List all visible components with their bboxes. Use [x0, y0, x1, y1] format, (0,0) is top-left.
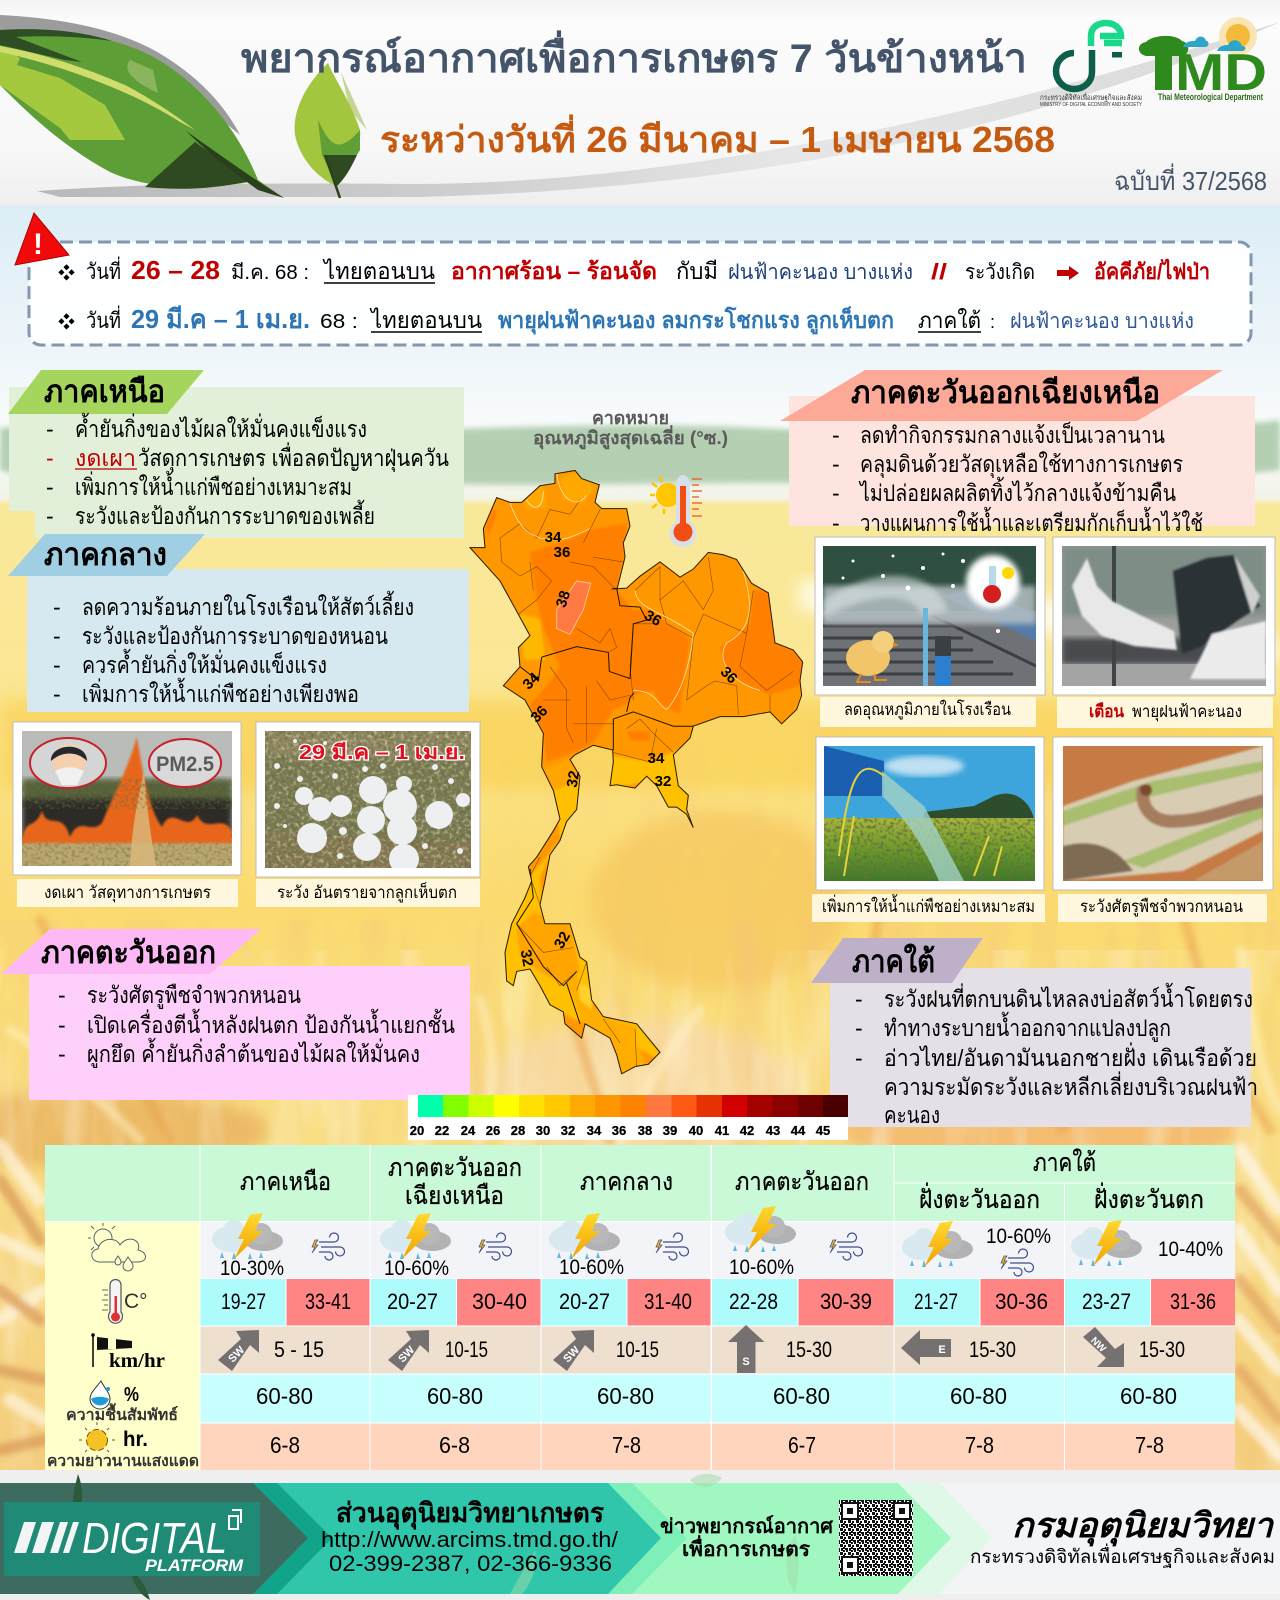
caption: no burning [17, 879, 238, 907]
alert line 1: มี.ค. 68 : [231, 262, 309, 284]
map temperature labels: 36 [554, 544, 570, 561]
forecast table [45, 1145, 1235, 1470]
heading: north [8, 370, 204, 414]
heading: south [811, 938, 983, 983]
alert line 2: ภาคใต้ [918, 308, 981, 333]
panel: east [1, 929, 470, 1100]
row: relative humidity: ความชื้นสัมพัทธ์ [66, 1403, 178, 1424]
map heading: คาดหมาย [592, 408, 669, 428]
list: east advice: - [58, 982, 66, 1008]
map heading: อุณหภูมิสูงสุดเฉลี่ย (°ซ.) [533, 425, 728, 450]
map temperature labels: 36 [641, 607, 664, 630]
list: east advice: เปิดเครื่องตีน้ำหลังฝนตก ป้องกันน้ำแยกชั้น [87, 1009, 455, 1038]
icon: wind arrows: SW [226, 1344, 248, 1365]
swoosh shadow [37, 22, 1280, 197]
alert line 2: : [990, 312, 995, 332]
caption: storm warning: เตือน [1089, 701, 1124, 721]
row: temperature [102, 1280, 1216, 1323]
list: northeast advice [832, 420, 1203, 536]
map temperature labels: 32 [655, 773, 671, 790]
list: north advice: - [46, 416, 54, 442]
list: north advice [46, 413, 449, 529]
icon: large green leaf [0, 15, 284, 198]
legend: temperature colour scale: 22 [435, 1123, 449, 1138]
list: south advice: - [855, 1015, 863, 1041]
legend: temperature colour scale: 42 [740, 1123, 754, 1138]
alert line 2 [58, 304, 1194, 335]
title: พยากรณ์อากาศเพื่อการเกษตร 7 วันข้างหน้า [241, 30, 1027, 81]
subtitle: date range: ระหว่างวันที่ 26 มีนาคม – 1 เมษายน 2568 [380, 114, 1055, 160]
humidity values: 60-80 [1120, 1383, 1177, 1409]
humidity values: 60-80 [256, 1383, 313, 1409]
icon: thermometer label [102, 1280, 148, 1323]
list: central advice: เพิ่มการให้น้ำแก่พืชอย่างเพียงพอ [82, 678, 359, 707]
temperature values: 20-27 [387, 1289, 438, 1314]
list: north advice: - [46, 474, 54, 500]
list: south advice: - [855, 986, 863, 1012]
sunshine values [270, 1432, 1164, 1458]
news label: ข่าวพยากรณ์อากาศ [660, 1515, 834, 1538]
caption: beware hail: ระวัง อันตรายจากลูกเห็บตก [277, 881, 457, 903]
list: north advice: วัสดุการเกษตร เพื่อลดปัญหาฝุ่นควัน [138, 442, 449, 472]
icon: thermometer label: C° [124, 1290, 148, 1313]
list: north advice: - [46, 445, 54, 471]
caption: beware worm pests: ระวังศัตรูพืชจำพวกหนอน [1080, 897, 1243, 917]
heading: central: ภาคกลาง [44, 537, 167, 572]
row: relative humidity [66, 1381, 1177, 1424]
list: northeast advice: ไม่ปล่อยผลผลิตทิ้งไว้กลางแจ้งข้ามคืน [858, 477, 1176, 506]
map temperature labels: 38 [553, 589, 574, 610]
caption: beware worm pests [1058, 894, 1267, 922]
list: north advice: เพิ่มการให้น้ำแก่พืชอย่างเหมาะสม [75, 471, 352, 500]
rain chances: 10-30% [220, 1257, 284, 1280]
caption: storm warning: พายุฝนฟ้าคะนอง [1132, 702, 1242, 722]
alert line 1: 26 – 28 [131, 255, 220, 285]
alert line 2: ฝนฟ้าคะนอง บางแห่ง [1010, 310, 1194, 333]
list: east advice [58, 982, 455, 1068]
humidity values: 60-80 [773, 1383, 830, 1409]
wind speeds: 10-15 [445, 1337, 488, 1362]
photo: roof sprinkler and chick [815, 537, 1045, 695]
department name [970, 1507, 1275, 1568]
legend: temperature colour scale: 30 [536, 1123, 550, 1138]
panel: north [8, 370, 464, 538]
list: south advice: ทำทางระบายน้ำออกจากแปลงปลูก [884, 1012, 1171, 1042]
department name: กระทรวงดิจิทัลเพื่อเศรษฐกิจและสังคม [970, 1543, 1275, 1568]
list: central advice: - [53, 652, 61, 678]
sunshine values: 6-8 [270, 1432, 300, 1458]
caption: storm warning [1057, 697, 1273, 728]
sunshine values: 7-8 [965, 1432, 994, 1458]
photo: storm-damaged tents [1053, 537, 1275, 695]
rain chances: 10-60% [559, 1256, 624, 1279]
map temperature labels: 34 [545, 529, 562, 546]
wind speeds: 10-15 [616, 1337, 659, 1362]
caption: reduce heat in coop [820, 697, 1036, 727]
alert line 1: อากาศร้อน – ร้อนจัด [451, 258, 657, 284]
caption: no burning: งดเผา วัสดุทางการเกษตร [44, 883, 211, 903]
row: weather [88, 1206, 1223, 1280]
sunshine values: 7-8 [1135, 1432, 1164, 1458]
alert line 1: อัคคีภัย/ไฟป่า [1094, 258, 1210, 284]
alert line 1: กับมี [676, 258, 718, 284]
legend: temperature colour scale: 32 [561, 1123, 575, 1138]
map temperature labels: 36 [527, 702, 551, 726]
temperature values: 21-27 [914, 1289, 958, 1314]
photo: hailstones: 29 มี.ค – 1 เม.ย. [299, 741, 465, 764]
caption: irrigate suitably [812, 894, 1045, 922]
caption: irrigate suitably: เพิ่มการให้น้ำแก่พืชอย่างเหมาะสม [822, 894, 1035, 916]
legend: temperature colour scale [408, 1095, 848, 1140]
table header row: ภาคใต้ [1033, 1148, 1096, 1177]
alert box [15, 213, 1251, 345]
list: south advice [855, 983, 1258, 1128]
weather icons [212, 1206, 1142, 1276]
temperature values: 20-27 [559, 1289, 610, 1314]
temperature values: 31-40 [644, 1289, 692, 1314]
icon: sun: hr. [123, 1428, 148, 1451]
list: northeast advice: - [832, 451, 840, 477]
icon: wind arrows: NW [1088, 1335, 1108, 1355]
panel: northeast [780, 370, 1255, 536]
heading: south: ภาคใต้ [852, 943, 935, 979]
temperature values: 22-28 [729, 1289, 778, 1314]
news label: เพื่อการเกษตร [682, 1534, 810, 1561]
contact text: ส่วนอุตุนิยมวิทยาเกษตร [336, 1498, 604, 1530]
legend: temperature colour scale: 44 [791, 1123, 806, 1138]
list: central advice: - [53, 623, 61, 649]
map temperature labels: 34 [648, 750, 665, 767]
list: central advice: ลดความร้อนภายในโรงเรือนให้สัตว์เลี้ยง [82, 591, 414, 620]
map temperature labels: 32 [564, 769, 583, 789]
list: northeast advice: ลดทำกิจกรรมกลางแจ้งเป็นเวลานาน [860, 420, 1165, 448]
list: central advice: ระวังและป้องกันการระบาดของหนอน [82, 623, 388, 649]
table header row: ฝั่งตะวันตก [1094, 1182, 1204, 1214]
list: central advice: ควรค้ำยันกิ่งให้มั่นคงแข็งแรง [82, 649, 327, 678]
humidity values: 60-80 [597, 1383, 654, 1409]
alert line 2: 29 มี.ค – 1 เม.ย. [131, 304, 310, 334]
list: south advice: - [855, 1045, 863, 1071]
humidity values: 60-80 [427, 1383, 483, 1409]
heading: northeast: ภาคตะวันออกเฉียงเหนือ [851, 375, 1160, 410]
list: east advice: - [58, 1012, 66, 1038]
sunshine values: 6-8 [439, 1432, 470, 1458]
temperature values: 30-40 [472, 1289, 527, 1314]
qr code [839, 1500, 913, 1576]
list: northeast advice: - [832, 510, 840, 536]
table header row [240, 1148, 1204, 1214]
wind speeds: 15-30 [969, 1337, 1016, 1362]
sunshine values: 6-7 [788, 1432, 816, 1458]
alert line 1: ❖ [58, 264, 75, 283]
table header row: เฉียงเหนือ [405, 1182, 504, 1210]
caption: beware hail [256, 879, 480, 907]
row: sunshine duration: ความยาวนานแสงแดด [47, 1453, 199, 1470]
list: north advice: ค้ำยันกิ่งของไม้ผลให้มั่นคงแข็งแรง [75, 413, 367, 442]
heading: north: ภาคเหนือ [44, 374, 165, 409]
department name: กรมอุตุนิยมวิทยา [1012, 1507, 1275, 1547]
legend: temperature colour scale: 28 [511, 1123, 525, 1138]
temperature values: 31-36 [1170, 1289, 1216, 1314]
alert line 1: ระวังเกิด [965, 261, 1035, 284]
panel: central [8, 534, 469, 712]
list: central advice [53, 591, 414, 707]
rain chances: 10-60% [986, 1225, 1051, 1248]
icon: windsock [91, 1333, 165, 1372]
legend: temperature colour scale: 36 [612, 1123, 626, 1138]
heading: northeast [780, 370, 1223, 421]
list: east advice: ระวังศัตรูพืชจำพวกหนอน [87, 982, 301, 1009]
logo: digital platform: PLATFORM [145, 1556, 244, 1575]
temperature values: 19-27 [221, 1289, 266, 1314]
map temperature labels: 34 [519, 669, 544, 693]
photo: water pipe over rice [816, 737, 1044, 890]
icon: wind arrows [218, 1325, 1124, 1373]
icon: warning triangle [15, 213, 69, 265]
alert line 1: ฝนฟ้าคะนอง บางแห่ง [728, 261, 913, 284]
icon: thermometer and sun [650, 475, 702, 547]
legend: temperature colour scale: 41 [715, 1123, 729, 1138]
icon: wind arrows: S [742, 1356, 750, 1368]
map temperature labels [517, 529, 741, 968]
temperature values [221, 1289, 1216, 1314]
logo: ministry of digital economy [1040, 23, 1143, 108]
contact text: http://www.arcims.tmd.go.th/ [321, 1527, 619, 1552]
alert line 2: ❖ [58, 313, 75, 332]
legend: temperature colour scale: 40 [689, 1123, 703, 1138]
icon: small green leaf [295, 63, 367, 198]
map heading [533, 408, 728, 450]
sunshine values: 7-8 [612, 1432, 641, 1458]
icon: warning triangle: ! [33, 228, 43, 261]
humidity values: 60-80 [950, 1383, 1007, 1409]
logo: digital platform: DIGITAL [82, 1514, 227, 1563]
map temperature labels: 32 [517, 948, 536, 968]
heading: east [1, 929, 261, 974]
caption: reduce heat in coop: ลดอุณหภูมิภายในโรงเรือน [844, 699, 1011, 720]
row: sunshine duration [47, 1422, 1164, 1470]
rain chances: 10-60% [384, 1257, 449, 1280]
table header row: ภาคเหนือ [240, 1168, 331, 1196]
footer band [0, 1474, 1280, 1600]
legend: temperature colour scale: 24 [461, 1123, 476, 1138]
list: northeast advice: - [832, 480, 840, 506]
icon: wind arrows: SW [396, 1344, 418, 1365]
contact text: 02-399-2387, 02-366-9336 [329, 1551, 612, 1576]
rain chances: 10-60% [729, 1256, 794, 1279]
alert line 1: // [931, 259, 947, 284]
photo: stem borer worm [1053, 737, 1273, 890]
list: northeast advice: - [832, 422, 840, 448]
icon: sun [79, 1422, 148, 1458]
alert line 1 [58, 255, 1210, 285]
alert line 2: 68 : [320, 311, 358, 333]
legend: temperature colour scale: 39 [663, 1123, 677, 1138]
temperature values: 23-27 [1082, 1289, 1131, 1314]
logo: ministry of digital economy: กระทรวงดิจิทัลเพื่อเศรษฐกิจและสังคม [1040, 92, 1142, 102]
list: south advice: อ่าวไทย/อันดามันนอกชายฝั่ง เดินเรือด้วย [884, 1042, 1257, 1071]
icon: windsock: km/hr [109, 1350, 165, 1372]
legend: temperature colour scale: 43 [766, 1123, 780, 1138]
icon: wind arrows: SW [561, 1344, 583, 1365]
issue number: ฉบับที่ 37/2568 [1114, 163, 1267, 196]
legend: temperature colour scale: 45 [816, 1123, 830, 1138]
contact text [321, 1498, 619, 1576]
logo: thai meteorological department [1139, 17, 1267, 102]
map temperature labels: 36 [717, 663, 741, 687]
table header row: ภาคตะวันออก [735, 1168, 869, 1196]
list: northeast advice: คลุมดินด้วยวัสดุเหลือใช้ทางการเกษตร [860, 451, 1183, 478]
legend: temperature colour scale: 38 [638, 1123, 652, 1138]
wind speeds: 15-30 [1139, 1337, 1185, 1362]
photo: field burning with PM2.5 [13, 722, 241, 875]
alert line 1: วันที่ [86, 256, 121, 284]
alert line 1: ไทยตอนบน [322, 258, 435, 284]
temperature values: 30-39 [820, 1289, 872, 1314]
news label [660, 1515, 834, 1561]
row: wind [91, 1325, 1185, 1373]
list: east advice: ผูกยึด ค้ำยันกิ่งลำต้นของไม้ผลให้มั่นคง [87, 1038, 420, 1068]
icon: humidity drop: % [124, 1384, 139, 1406]
icon: weather row label [88, 1223, 146, 1271]
heading: central [8, 534, 205, 576]
thailand max temperature map [460, 460, 820, 1080]
list: north advice: ระวังและป้องกันการระบาดของเพลี้ย [75, 500, 375, 529]
list: north advice: - [46, 503, 54, 529]
alert line 2: ไทยตอนบน [369, 307, 482, 333]
table header row: ภาคตะวันออก [388, 1154, 522, 1182]
legend: temperature colour scale: 20 [410, 1123, 424, 1138]
alert line 2: พายุฝนฟ้าคะนอง ลมกระโชกแรง ลูกเห็บตก [498, 305, 894, 335]
legend: temperature colour scale: 34 [587, 1123, 602, 1138]
logo: ministry of digital economy: MINISTRY OF DIGITAL ECONOMY AND SOCIETY [1040, 102, 1143, 108]
humidity values [256, 1383, 1177, 1409]
wind speeds [274, 1337, 1185, 1362]
list: south advice: คะนอง [884, 1102, 940, 1128]
temperature values: 33-41 [305, 1289, 351, 1314]
temperature values: 30-36 [995, 1289, 1048, 1314]
list: northeast advice: วางแผนการใช้น้ำและเตรียมกักเก็บน้ำไว้ใช้ [860, 507, 1203, 536]
table header row: ภาคกลาง [580, 1168, 673, 1196]
list: north advice: งดเผา [75, 445, 136, 471]
icon: humidity drop [90, 1381, 139, 1409]
list: central advice: - [53, 594, 61, 620]
rain chances [220, 1225, 1223, 1280]
wind speeds: 5 - 15 [274, 1337, 324, 1362]
wind speeds: 15-30 [786, 1337, 832, 1362]
photo: hailstones [256, 722, 480, 877]
alert line 2: วันที่ [86, 305, 121, 333]
heading: east: ภาคตะวันออก [41, 935, 216, 970]
header banner [0, 0, 1280, 205]
map temperature labels: 32 [551, 929, 574, 952]
rain chances: 10-40% [1158, 1238, 1223, 1261]
logo: thai meteorological department: MD [1175, 44, 1267, 102]
legend: temperature colour scale: 26 [486, 1123, 500, 1138]
table background cells [45, 1145, 1235, 1470]
panel: south [811, 938, 1258, 1128]
list: central advice: - [53, 681, 61, 707]
table header row: ฝั่งตะวันออก [919, 1182, 1040, 1214]
list: east advice: - [58, 1041, 66, 1067]
icon: wind arrows: E [938, 1344, 946, 1356]
logo: digital platform [4, 1502, 260, 1576]
photo: field burning with PM2.5: PM2.5 [156, 753, 214, 776]
